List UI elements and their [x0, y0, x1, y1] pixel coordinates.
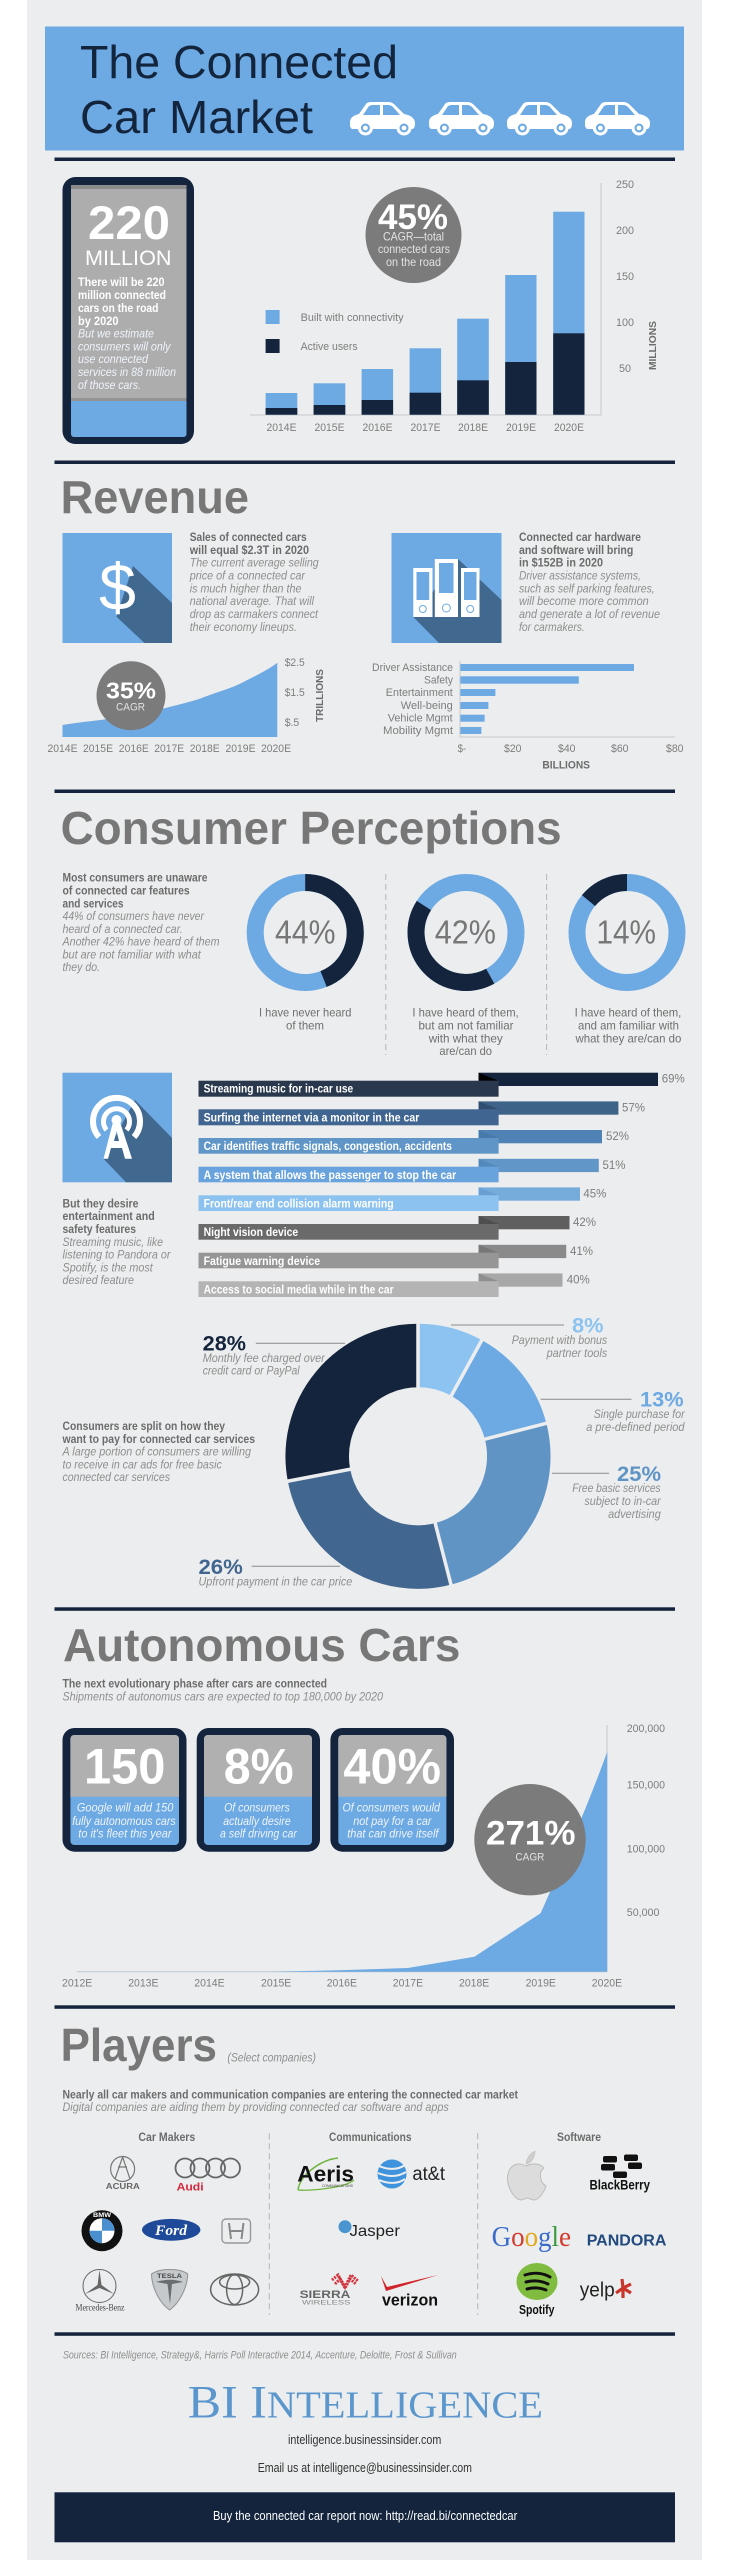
callout: 25 percent: advertising [608, 1507, 661, 1521]
text block: payment split: Consumers are split on how they [62, 1419, 225, 1433]
chart: donut 14 percent: and am familiar with [578, 1018, 679, 1032]
callout: 26 percent [198, 1556, 353, 1588]
logo: Honda [222, 2219, 250, 2243]
big number: 220 [88, 196, 170, 249]
chart: donut 14 percent: what they are/can do [575, 1031, 682, 1045]
axis labels: 2015E [83, 743, 113, 755]
chart: donut 42 percent: are/can do [439, 1044, 492, 1058]
chart: donut 44 percent: 44% [275, 913, 336, 950]
stat card: 40%: 40% [343, 1738, 441, 1794]
x axis labels: 2015E [261, 1978, 291, 1990]
stat card: 150: to it's fleet this year [78, 1826, 172, 1840]
ribbon: 45 percent [198, 1186, 607, 1211]
chart: donut 44 percent: I have never heard [259, 1006, 351, 1020]
text block [519, 530, 660, 634]
icon: antenna tower [62, 1073, 172, 1182]
category labels: Well-being [401, 700, 453, 712]
logo: Verizon: verizon [382, 2291, 438, 2310]
chart: ribbon bars of desired features [198, 1072, 685, 1297]
logo: Acura [106, 2156, 140, 2191]
header banner [45, 26, 684, 150]
chart: donut 14 percent: I have heard of them, [575, 1006, 681, 1020]
panel: communications logos [297, 2130, 446, 2310]
stat card: 8%: actually desire [223, 1814, 291, 1828]
text block: players intro: Digital companies are aiding them by providing connected car software and apps [62, 2100, 449, 2114]
stat card: 8%: 8% [224, 1738, 294, 1794]
logo: Yelp: yelp [580, 2280, 615, 2302]
text block: desired features: Streaming music, like [62, 1235, 163, 1249]
chart: payment preference donut [198, 1315, 685, 1588]
logo: BlackBerry: BlackBerry [590, 2176, 650, 2192]
heading: Players: Players [61, 2019, 217, 2071]
callout: 25 percent [552, 1463, 662, 1521]
logo: BMW [82, 2210, 122, 2251]
text block: desired features: entertainment and [62, 1209, 155, 1223]
logo: Spotify [516, 2263, 558, 2317]
logo: Aeris: COMMUNICATIONS [322, 2184, 354, 2188]
logo: Tesla [152, 2270, 188, 2310]
text block: consumers unaware: heard of a connected car. [62, 922, 183, 936]
logo: Jasper: Jasper [350, 2223, 401, 2240]
callout: 13 percent [541, 1389, 685, 1434]
callout: 28 percent: Monthly fee charged over [203, 1351, 326, 1365]
callout: 45% CAGR: 45% [378, 198, 448, 237]
y axis labels [616, 179, 659, 375]
y axis labels: 100 [616, 317, 634, 329]
panel: hardware and software revenue [392, 530, 660, 643]
text block: autonomous intro: The next evolutionary phase after cars are connected [62, 1676, 327, 1690]
contact email: Email us at intelligence@businessinsider.com [258, 2460, 472, 2475]
callout: 13 percent: Single purchase for [594, 1407, 685, 1421]
chart: donut 14 percent [575, 882, 682, 1045]
callout: 45% CAGR: CAGR—total [383, 230, 444, 244]
card description: There will be 220 [78, 275, 165, 289]
heading: Autonomous Cars: Autonomous Cars [63, 1619, 460, 1671]
chart: donut 42 percent: I have heard of them, [412, 1006, 519, 1020]
icon: row of cars [350, 102, 650, 136]
x axis labels: 2016E [362, 422, 392, 434]
logo: AT&T: at&t [412, 2164, 446, 2185]
ribbon: 52 percent [198, 1129, 629, 1154]
value axis labels: $80 [666, 743, 684, 755]
text block: and generate a lot of revenue [519, 607, 660, 621]
callout: 13 percent: 13% [640, 1389, 684, 1412]
text block: national average. That will [190, 594, 314, 608]
value axis labels [458, 743, 684, 772]
heading: Consumer Perceptions: Consumer Perceptions [61, 802, 562, 854]
card description: cars on the road [78, 301, 158, 315]
x axis labels [266, 422, 584, 434]
chart: donut 14 percent: 14% [596, 913, 656, 950]
card description: services in 88 million [78, 365, 176, 379]
axis labels: 2020E [261, 743, 291, 755]
stat card: 8%: a self driving car [220, 1826, 298, 1840]
ribbon: 42 percent [198, 1215, 596, 1240]
y axis labels: 200,000 [627, 1723, 665, 1735]
text block: price of a connected car [189, 568, 306, 582]
logo: Sierra Wireless [300, 2275, 358, 2307]
panel: software logos [492, 2130, 667, 2317]
logo: Sierra Wireless: WIRELESS [302, 2301, 350, 2307]
value axis labels: $- [458, 743, 466, 755]
x axis labels: 2014E [266, 422, 296, 434]
callout: 25 percent: subject to in-car [584, 1494, 662, 1508]
ribbon: 42 percent: Night vision device [204, 1225, 298, 1239]
stat card: 150 [62, 1728, 186, 1852]
heading: Players: (Select companies) [227, 2051, 316, 2065]
category labels [372, 662, 453, 737]
ribbon: 69 percent [198, 1072, 685, 1097]
logo: Tesla: TESLA [157, 2274, 183, 2280]
card description: consumers will only [78, 340, 171, 354]
chart: revenue by category bars [372, 661, 684, 772]
heading: Players [61, 2019, 316, 2071]
ribbon: 41 percent [198, 1244, 593, 1268]
panel: communications logos: Communications [329, 2130, 412, 2144]
text block: Sales of connected cars [190, 530, 307, 544]
text block: consumers unaware: Most consumers are unaware [62, 871, 208, 885]
ribbon: 41 percent: 41% [570, 1244, 593, 1258]
chart: autonomous shipments area [62, 1723, 665, 1990]
callout: 271% CAGR [474, 1784, 586, 1895]
logo: AT&T [378, 2160, 446, 2188]
text block: consumers unaware: of connected car features [62, 884, 190, 898]
axis labels: $2.5 [285, 657, 305, 669]
ribbon: 57 percent: 57% [622, 1100, 645, 1114]
stat card: 40%: Of consumers would [342, 1801, 440, 1815]
chart: donut 42 percent: but am not familiar [418, 1018, 514, 1032]
logo: BlackBerry [590, 2154, 650, 2192]
logo: Ford: Ford [154, 2223, 188, 2239]
icon: binders [392, 533, 502, 643]
logo: Pandora: PANDORA [587, 2232, 667, 2249]
ribbon: 51 percent: 51% [602, 1158, 626, 1172]
category labels: Vehicle Mgmt [388, 713, 453, 725]
chart: donut 42 percent [412, 882, 519, 1058]
y axis labels: 200 [616, 225, 634, 237]
y axis labels: 100,000 [627, 1843, 665, 1855]
sources note: Sources: BI Intelligence, Strategy&, Harris Poll Interactive 2014, Accenture, Deloitte, Frost & Sullivan [63, 2350, 457, 2362]
text block: is much higher than the [190, 581, 302, 595]
chart: donut 44 percent: of them [286, 1018, 324, 1032]
callout: 25 percent: 25% [617, 1463, 661, 1486]
y axis labels: 150,000 [627, 1780, 665, 1792]
unit: MILLION [85, 247, 172, 270]
axis labels: $1.5 [285, 687, 305, 699]
text block: desired features: But they desire [62, 1196, 139, 1210]
logo: Aeris: Aeris [297, 2162, 354, 2187]
logo: Sierra Wireless: SIERRA [300, 2289, 350, 2301]
title line two: Car Market [80, 91, 313, 143]
text block: desired features: desired feature [62, 1273, 134, 1287]
text block: The current average selling [190, 556, 319, 570]
text block: in $152B in 2020 [519, 556, 603, 570]
stat card: 40% [330, 1728, 454, 1852]
ribbon: 69 percent: Streaming music for in-car use [204, 1082, 353, 1096]
y axis labels: 250 [616, 179, 634, 191]
logo: Audi: Audi [177, 2182, 204, 2194]
axis labels: TRILLIONS [314, 669, 326, 722]
legend [266, 310, 404, 353]
ribbon: 57 percent [198, 1100, 645, 1125]
value axis labels: $20 [504, 743, 522, 755]
logo: Mercedes-Benz: Mercedes-Benz [76, 2303, 124, 2313]
axis labels: 2014E [48, 743, 78, 755]
text block: payment split: A large portion of consumers are willing [62, 1445, 251, 1459]
text block: will equal $2.3T in 2020 [189, 543, 309, 557]
x axis labels: 2014E [194, 1978, 225, 1990]
chart: connected cars stacked bars [250, 179, 659, 434]
callout: 26 percent: Upfront payment in the car price [198, 1574, 353, 1588]
card description [78, 275, 176, 392]
text block: Driver assistance systems, [519, 568, 641, 582]
axis labels: 2017E [154, 743, 184, 755]
x axis labels: 2017E [410, 422, 440, 434]
text block: and software will bring [519, 543, 633, 557]
logo: Google: Google [492, 2222, 571, 2253]
text block: for carmakers. [519, 620, 585, 634]
callout: 8 percent: partner tools [546, 1346, 607, 1360]
ribbon: 45 percent: 45% [583, 1186, 607, 1200]
value axis labels: $40 [558, 743, 576, 755]
y axis labels [627, 1723, 665, 1919]
card description: million connected [78, 288, 166, 302]
value axis labels: BILLIONS [542, 760, 590, 772]
text block: autonomous intro: Shipments of autonomus cars are expected to top 180,000 by 2020 [62, 1690, 383, 1704]
axis labels: $.5 [285, 717, 299, 729]
ribbon: 52 percent: Car identifies traffic signals, congestion, accidents [204, 1139, 452, 1153]
icon: dollar: $ [99, 550, 136, 624]
chart: connected car sales area [48, 657, 326, 755]
text block: consumers unaware [62, 871, 220, 974]
ribbon: 51 percent: A system that allows the passenger to stop the car [204, 1168, 456, 1182]
y axis labels: 50,000 [627, 1907, 659, 1919]
panel: 220 million phone card [62, 177, 194, 444]
callout: 13 percent: a pre-defined period [586, 1420, 685, 1434]
stat card: 40%: that can drive itself [347, 1826, 440, 1840]
stat card: 40%: not pay for a car [353, 1814, 432, 1828]
x axis labels: 2015E [314, 422, 344, 434]
text block: such as self parking features, [519, 581, 655, 595]
title: The Connected [80, 36, 398, 88]
ribbon: 40 percent [198, 1272, 590, 1297]
stat card: 150: 150 [84, 1738, 165, 1794]
logo: Spotify: Spotify [519, 2302, 555, 2317]
ribbon: 52 percent: 52% [606, 1129, 629, 1143]
callout: 271% CAGR: CAGR [515, 1852, 544, 1864]
text block: consumers unaware: Another 42% have heard of them [62, 935, 220, 949]
icon: dollar [62, 533, 172, 643]
chart: donut 42 percent: with what they [428, 1031, 503, 1045]
footer call to action: Buy the connected car report now: http://read.bi/connectedcar [213, 2508, 518, 2523]
text block [189, 530, 319, 634]
callout: 35% CAGR [96, 661, 166, 730]
text block: payment split: to receive in car ads for free basic [62, 1458, 222, 1472]
ribbon: 45 percent: Front/rear end collision alarm warning [204, 1196, 394, 1210]
x axis labels: 2019E [526, 1978, 556, 1990]
callout: 28 percent: 28% [203, 1333, 246, 1356]
footer call to action [54, 2492, 675, 2542]
callout: 35% CAGR: CAGR [116, 702, 145, 714]
axis labels: 2019E [226, 743, 256, 755]
y axis labels: 150 [616, 271, 634, 283]
callout: 26 percent: 26% [198, 1556, 243, 1579]
panel: sales of connected cars [62, 530, 319, 643]
logo: Audi [176, 2158, 240, 2194]
logo: Verizon [381, 2275, 438, 2310]
x axis labels: 2018E [459, 1978, 489, 1990]
callout: 8 percent: 8% [572, 1315, 604, 1338]
logo: Ford [142, 2219, 200, 2241]
card description: But we estimate [78, 326, 154, 340]
callout: 28 percent: credit card or PayPal [203, 1364, 300, 1378]
stat card: 150: Google will add 150 [77, 1801, 174, 1815]
card description: by 2020 [78, 314, 119, 328]
chart: donut 42 percent: 42% [435, 913, 496, 950]
logo: Toyota [211, 2274, 259, 2305]
text block: payment split: connected car services [62, 1470, 170, 1484]
callout: 45% CAGR: connected cars [378, 242, 450, 256]
text block: consumers unaware: but are not familiar with what [62, 948, 201, 962]
logo: BMW: BMW [93, 2213, 111, 2219]
callout: 271% CAGR: 271% [486, 1814, 576, 1852]
panel: software logos: Software [557, 2130, 601, 2144]
text block: desired features [62, 1196, 171, 1287]
ribbon: 69 percent: 69% [662, 1072, 685, 1086]
logo: Apple [507, 2151, 546, 2200]
text block: payment split: want to pay for connected car services [62, 1432, 255, 1446]
ribbon: 40 percent: Access to social media while in the car [204, 1282, 394, 1296]
text block: players intro [62, 2087, 518, 2114]
text block: players intro: Nearly all car makers and communication companies are entering the connected car market [62, 2087, 518, 2101]
text block: autonomous intro [62, 1676, 383, 1704]
x axis labels: 2018E [458, 422, 488, 434]
axis labels [48, 657, 326, 755]
text block: desired features: Spotify, is the most [62, 1260, 153, 1274]
stat card: 150: fully autonomous cars [72, 1814, 176, 1828]
callout: 35% CAGR: 35% [106, 678, 156, 704]
value axis labels: $60 [611, 743, 628, 755]
chart: donut 44 percent [255, 882, 355, 1032]
text block: consumers unaware: they do. [62, 960, 100, 974]
contact website: intelligence.businessinsider.com [288, 2432, 441, 2447]
callout: 28 percent [203, 1333, 345, 1378]
axis labels: 2016E [119, 743, 149, 755]
logo: Jasper [338, 2220, 401, 2240]
text block: desired features: safety features [62, 1222, 136, 1236]
ribbon: 40 percent: 40% [567, 1272, 590, 1286]
axis labels: 2018E [190, 743, 220, 755]
legend: Active users [301, 341, 358, 353]
logo: Mercedes-Benz [76, 2270, 124, 2313]
text block: desired features: listening to Pandora or [62, 1248, 171, 1262]
y axis labels: MILLIONS [647, 321, 659, 370]
text block: consumers unaware: and services [62, 896, 124, 910]
x axis labels: 2020E [592, 1978, 622, 1990]
legend: Built with connectivity [301, 312, 404, 324]
text block: Connected car hardware [519, 530, 641, 544]
card description: use connected [78, 352, 148, 366]
callout: 8 percent: Payment with bonus [512, 1333, 607, 1347]
category labels: Entertainment [386, 687, 453, 699]
x axis labels [62, 1978, 622, 1990]
text block: drop as carmakers connect [190, 607, 319, 621]
x axis labels: 2012E [62, 1978, 92, 1990]
panel: car makers logos [76, 2130, 259, 2313]
x axis labels: 2016E [327, 1978, 357, 1990]
stat card: 8% [197, 1728, 320, 1852]
text block: will become more common [519, 594, 649, 608]
x axis labels: 2017E [393, 1978, 423, 1990]
ribbon: 57 percent: Surfing the internet via a monitor in the car [204, 1110, 420, 1124]
heading: Revenue: Revenue [61, 471, 249, 523]
callout: 25 percent: Free basic services [572, 1481, 661, 1495]
text block: consumers unaware: 44% of consumers have never [62, 909, 205, 923]
text block: payment split [62, 1419, 255, 1484]
text block: their economy lineups. [190, 620, 297, 634]
logo: Yelp [580, 2279, 631, 2302]
callout: 45% CAGR: on the road [386, 255, 441, 269]
logo: BI Intelligence: BI INTELLIGENCE [188, 2377, 543, 2429]
card description: of those cars. [78, 378, 141, 392]
category labels: Driver Assistance [372, 662, 453, 674]
callout: 8 percent [451, 1315, 607, 1360]
x axis labels: 2013E [128, 1978, 158, 1990]
x axis labels: 2019E [506, 422, 536, 434]
category labels: Mobility Mgmt [383, 725, 453, 737]
logo: Acura: ACURA [106, 2182, 140, 2191]
callout: 45% CAGR [366, 187, 462, 283]
ribbon: 42 percent: 42% [573, 1215, 596, 1229]
panel: car makers logos: Car Makers [138, 2130, 196, 2144]
x axis labels: 2020E [554, 422, 584, 434]
category labels: Safety [424, 675, 453, 687]
ribbon: 51 percent [198, 1158, 626, 1182]
stat card: 8%: Of consumers [224, 1801, 290, 1815]
y axis labels: 50 [619, 363, 631, 375]
ribbon: 41 percent: Fatigue warning device [204, 1254, 320, 1268]
